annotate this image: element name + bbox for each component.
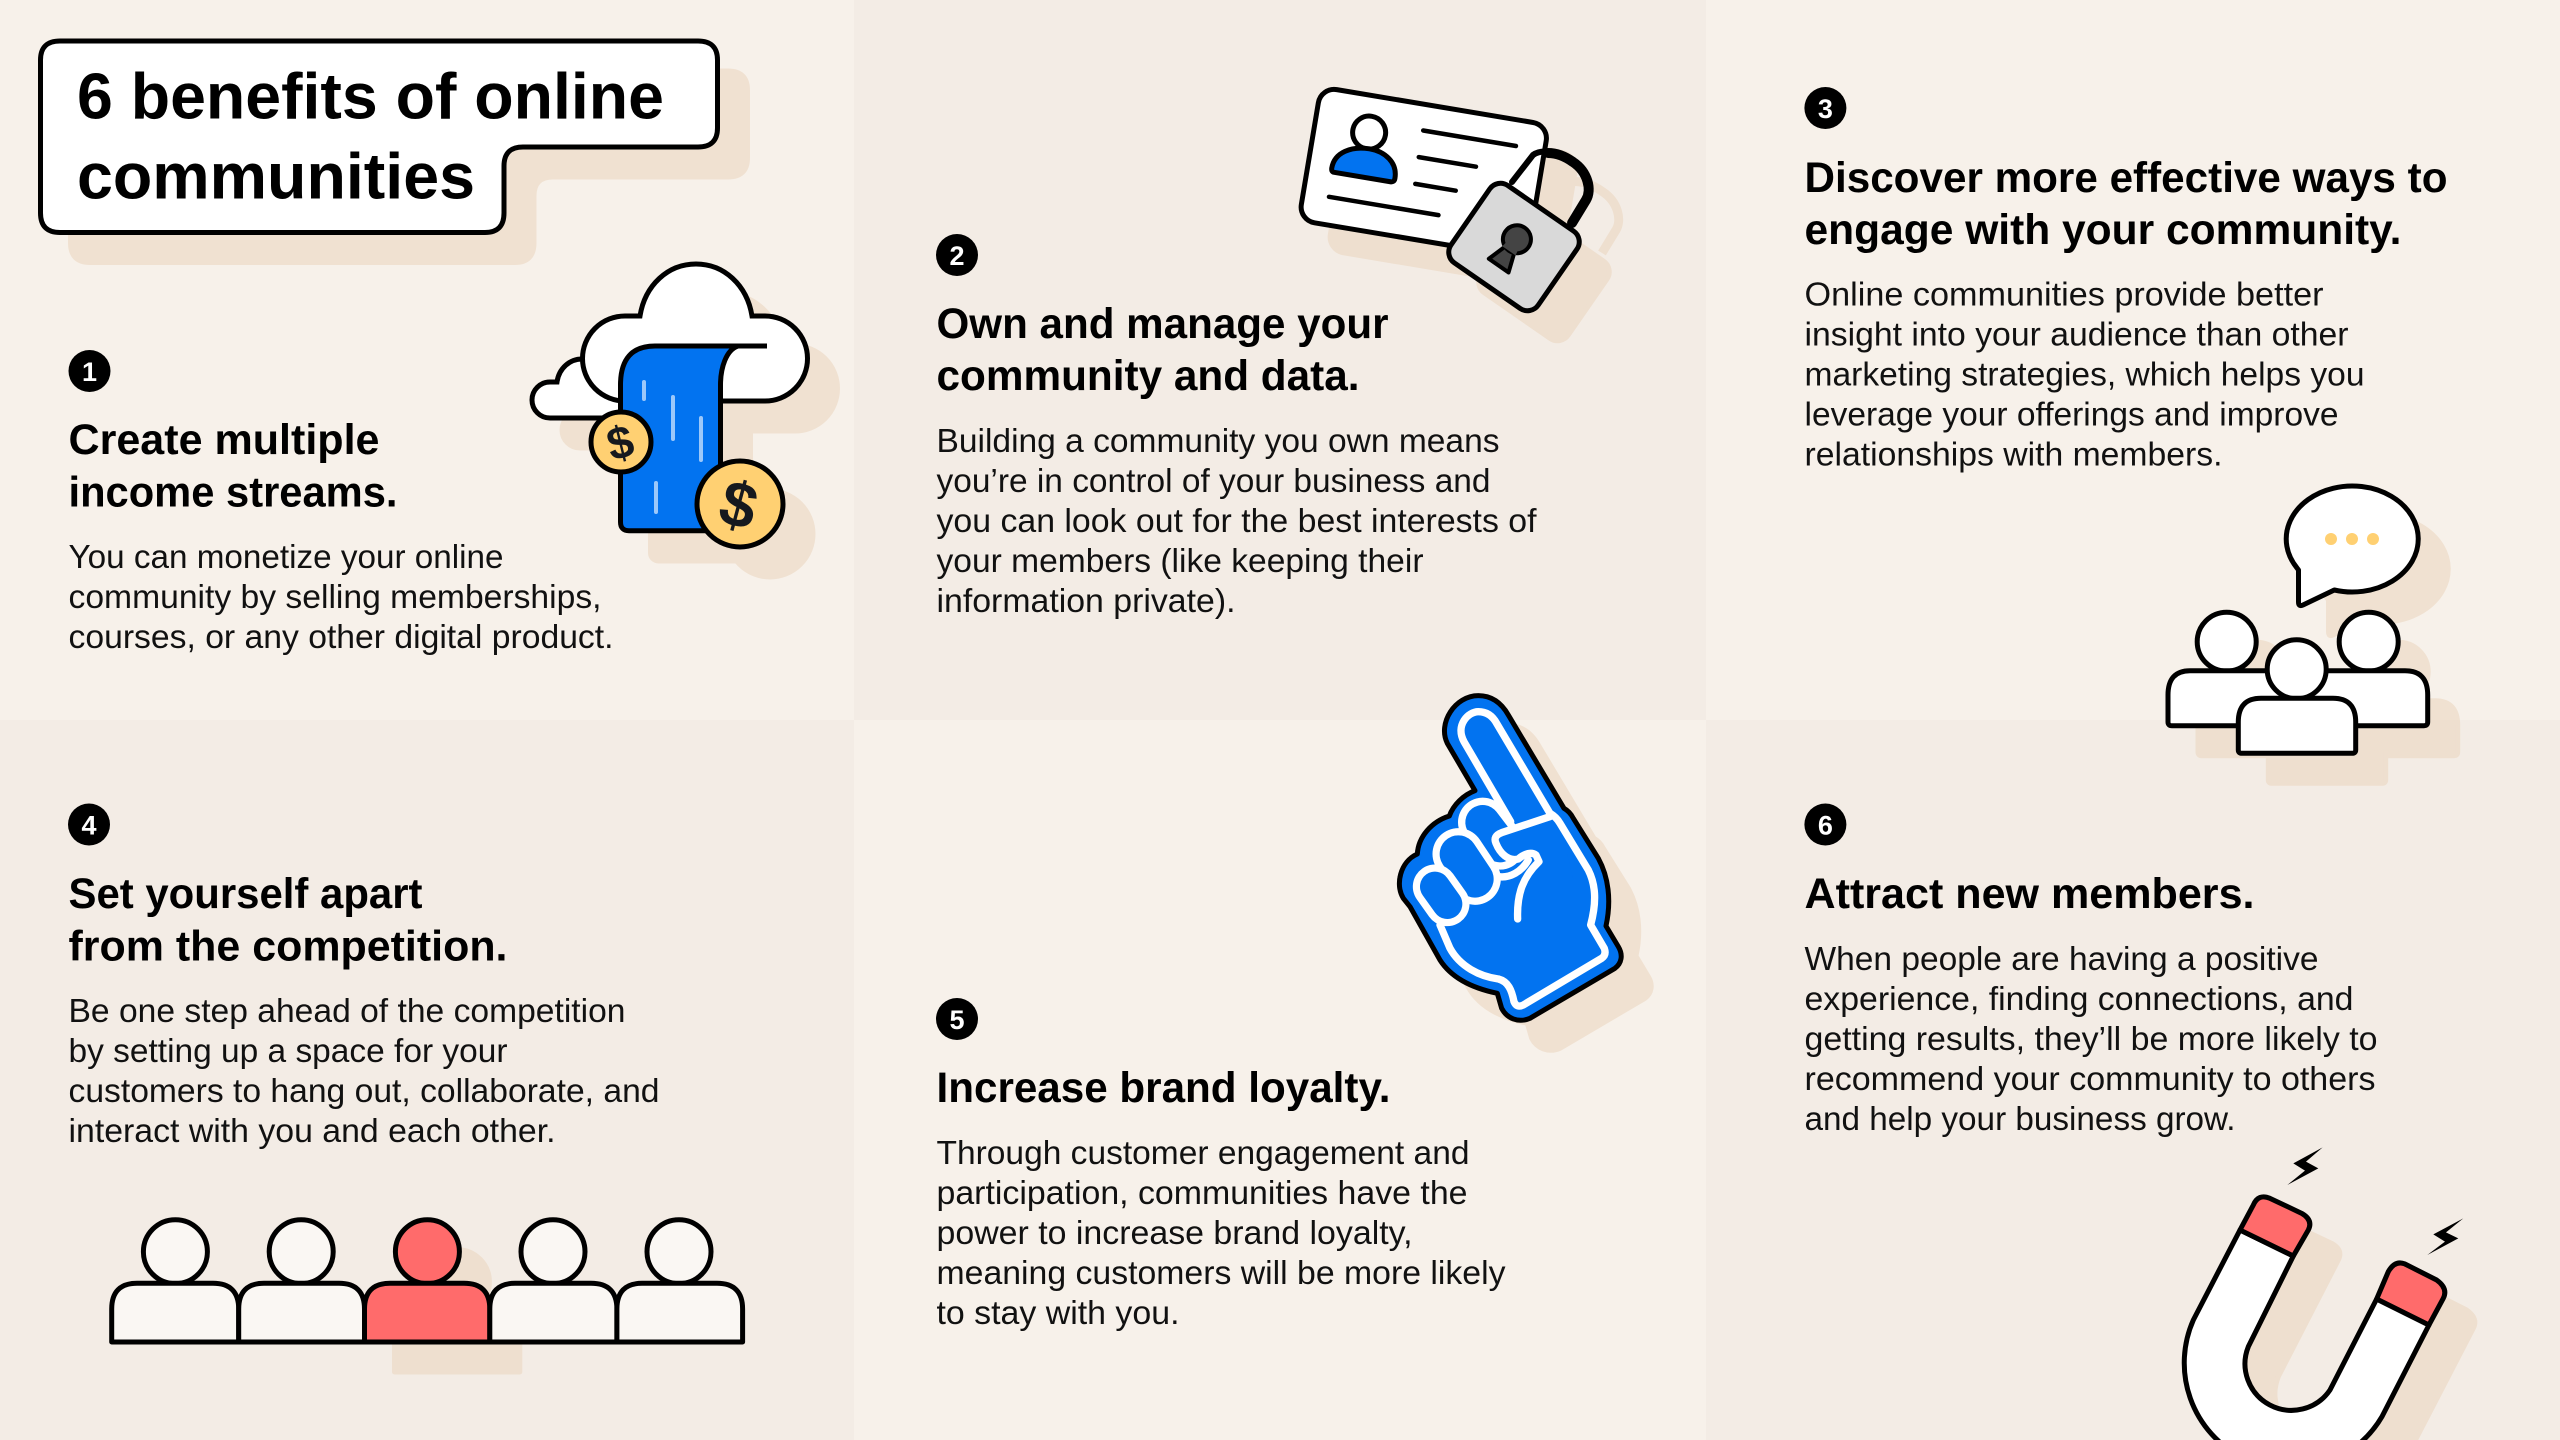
body 4: Be one step ahead of the competition — [68, 993, 626, 1030]
speech bubble — [2286, 486, 2418, 606]
body 2: you can look out for the best interests of — [936, 503, 1537, 540]
magnet — [2184, 1197, 2445, 1440]
person 3 highlighted — [364, 1220, 490, 1342]
red person shadow — [394, 1250, 520, 1372]
title text: communities — [77, 140, 475, 212]
illustration 1 shadow — [562, 294, 838, 577]
badge 3: 3 — [1818, 94, 1833, 124]
body 5: to stay with you. — [936, 1295, 1180, 1332]
illustration 2 shadow — [1328, 117, 1619, 346]
body 3: insight into your audience than other — [1804, 316, 2348, 354]
badge 3 — [1804, 87, 1846, 129]
heading 2: Own and manage your — [936, 300, 1389, 348]
small cloud — [532, 359, 640, 418]
ID card — [1299, 87, 1549, 258]
body 2: you’re in control of your business and — [936, 463, 1490, 500]
heading 2: community and data. — [936, 352, 1360, 400]
heading 4: Set yourself apart — [68, 870, 422, 918]
banner streaks — [644, 382, 701, 512]
illustration: ID card and padlock — [1299, 87, 1619, 346]
back person left — [2168, 612, 2300, 726]
badge 1 — [68, 350, 110, 392]
badge 2: 2 — [949, 241, 965, 271]
lightning bolt right — [2427, 1218, 2463, 1255]
body 5: power to increase brand loyalty, — [936, 1215, 1412, 1252]
heading 3: Discover more effective ways to — [1804, 154, 2448, 202]
heading 4: from the competition. — [68, 922, 508, 970]
panel 3: engagement — [1804, 87, 2458, 783]
body 6: and help your business grow. — [1804, 1101, 2236, 1138]
panel 6: new members — [1804, 804, 2475, 1440]
body 3: marketing strategies, which helps you — [1804, 356, 2364, 394]
badge 5: 5 — [949, 1005, 965, 1035]
body 6: experience, finding connections, and — [1804, 981, 2354, 1018]
body 4: by setting up a space for your — [68, 1033, 508, 1070]
illustration: row of people — [112, 1220, 743, 1372]
small coin: $ — [601, 414, 639, 471]
body 5: participation, communities have the — [936, 1175, 1468, 1212]
foam finger shape — [1399, 696, 1621, 1020]
heading 5: Increase brand loyalty. — [936, 1064, 1390, 1112]
body 3: leverage your offerings and improve — [1804, 396, 2338, 434]
lightning bolt left — [2287, 1147, 2323, 1185]
person 2 — [239, 1220, 364, 1342]
heading 3: engage with your community. — [1804, 206, 2402, 254]
body 2: your members (like keeping their — [936, 543, 1424, 580]
illustration: cloud, banner and coins — [532, 264, 838, 577]
bubble dots — [2325, 533, 2379, 545]
small coin — [591, 412, 651, 472]
panel 4: competition — [68, 804, 743, 1372]
badge 6 — [1804, 804, 1846, 846]
badge 6: 6 — [1818, 810, 1833, 840]
large coin — [697, 461, 783, 547]
body 2: information private). — [936, 583, 1236, 620]
body 1: You can monetize your online — [68, 539, 504, 576]
padlock shackle — [1512, 152, 1589, 223]
badge 4 — [68, 804, 110, 846]
person 4 — [490, 1220, 617, 1342]
body 2: Building a community you own means — [936, 423, 1500, 460]
heading 1: Create multiple — [68, 416, 380, 464]
body 1: community by selling memberships, — [68, 579, 602, 616]
banner curl — [730, 344, 767, 348]
title shadow — [70, 71, 748, 262]
blue banner — [620, 346, 738, 531]
big cloud — [582, 264, 808, 401]
body 4: customers to hang out, collaborate, and — [68, 1073, 660, 1110]
title text: 6 benefits of online — [77, 60, 664, 132]
foam finger shadow — [1429, 726, 1651, 1050]
front person — [2238, 640, 2356, 753]
badge 5 — [936, 998, 978, 1040]
illustration: group with speech bubble — [2168, 486, 2458, 783]
heading 6: Attract new members. — [1804, 870, 2254, 918]
large coin: $ — [712, 465, 765, 544]
illustration: horseshoe magnet — [2184, 1147, 2475, 1440]
body 3: Online communities provide better — [1804, 276, 2324, 314]
magnet shadow — [2214, 1227, 2475, 1440]
person 1 — [112, 1220, 239, 1342]
panel 1: income streams — [68, 264, 838, 656]
heading 1: income streams. — [68, 468, 398, 516]
panel 2: own and manage — [936, 87, 1619, 620]
title box — [40, 41, 718, 232]
body 1: courses, or any other digital product. — [68, 619, 614, 656]
illustration: foam finger — [1399, 696, 1651, 1050]
padlock body — [1444, 178, 1584, 316]
badge 4: 4 — [81, 810, 97, 840]
back person right — [2300, 612, 2428, 726]
body 6: getting results, they’ll be more likely to — [1804, 1021, 2378, 1058]
body 5: meaning customers will be more likely — [936, 1255, 1506, 1292]
badge 1: 1 — [82, 357, 97, 387]
badge 2 — [936, 234, 978, 276]
body 5: Through customer engagement and — [936, 1135, 1470, 1172]
illustration 3 shadow — [2198, 516, 2458, 783]
title block — [40, 41, 748, 262]
body 6: When people are having a positive — [1804, 941, 2318, 978]
body 4: interact with you and each other. — [68, 1113, 556, 1150]
body 3: relationships with members. — [1804, 436, 2222, 474]
person 5 — [617, 1220, 743, 1342]
panel 5: brand loyalty — [936, 696, 1651, 1332]
body 6: recommend your community to others — [1804, 1061, 2376, 1098]
